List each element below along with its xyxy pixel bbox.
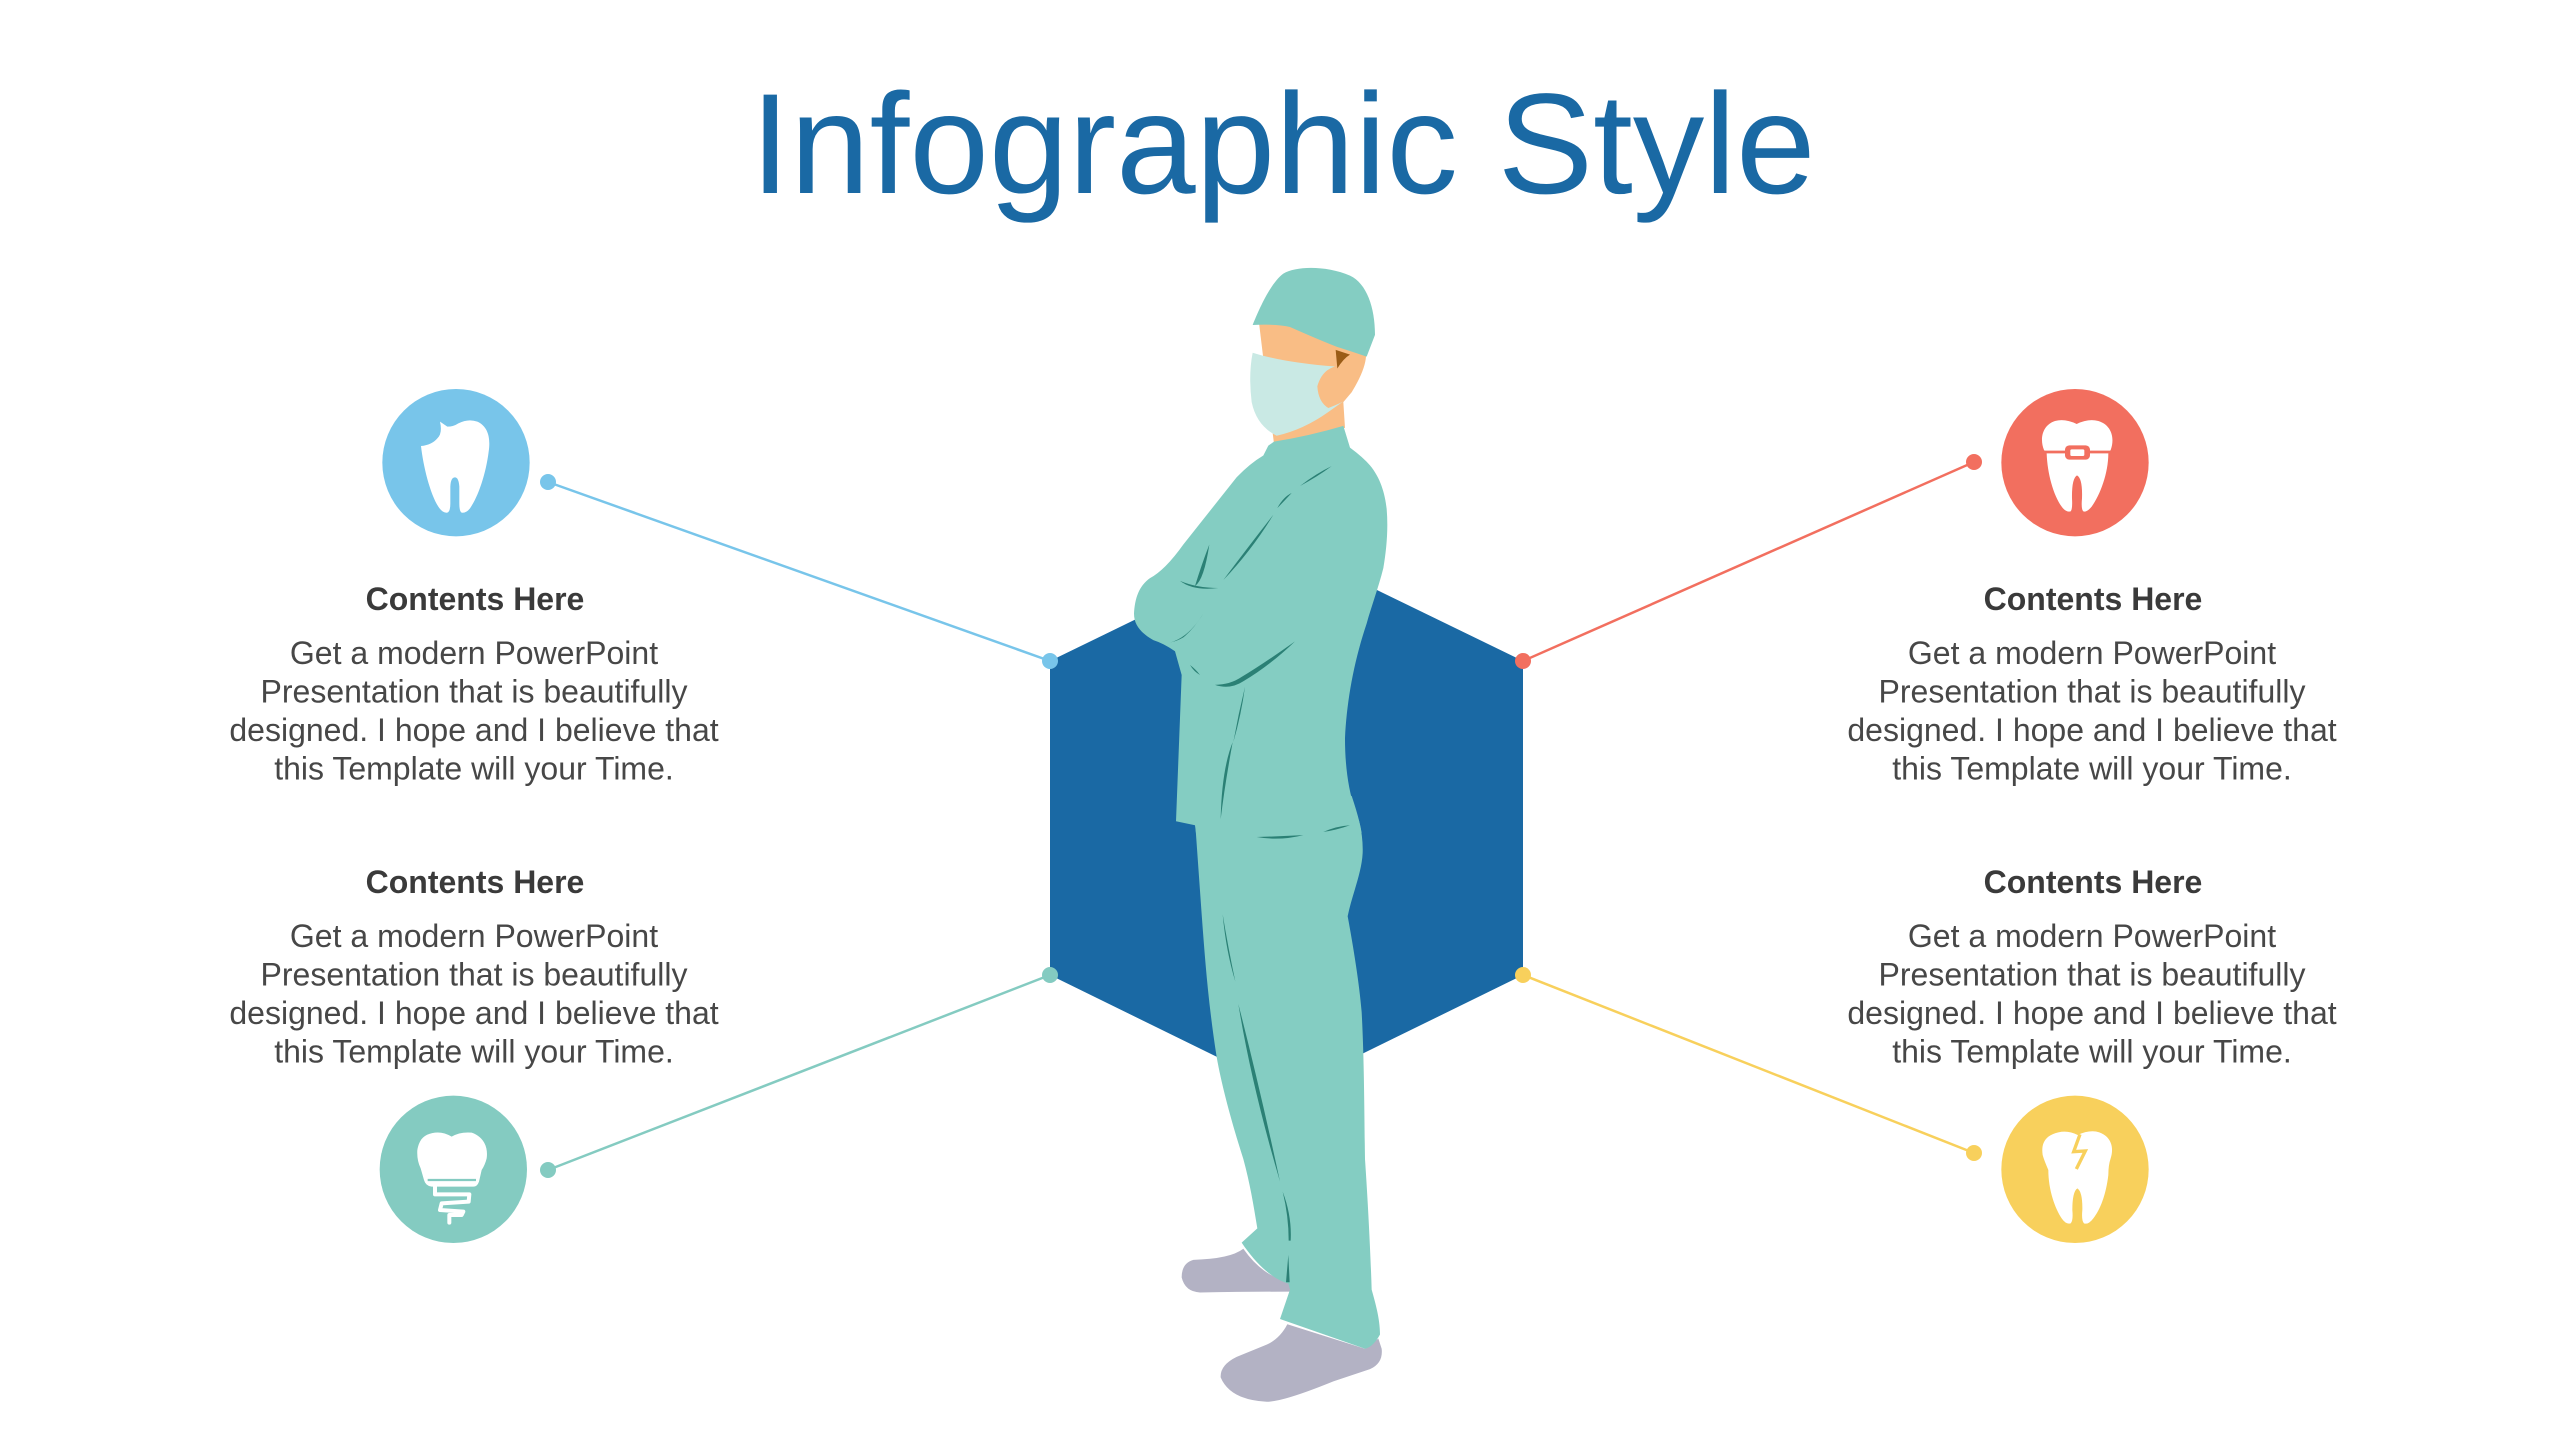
icon: tooth with braces xyxy=(2001,389,2149,536)
text block: top left: this Template will your Time. xyxy=(274,750,674,786)
text block: bottom left: Get a modern PowerPoint xyxy=(290,918,658,954)
text block: top right: Presentation that is beautifully xyxy=(1879,674,2305,710)
text block: bottom right xyxy=(1847,864,2337,1070)
text block: bottom left: this Template will your Time. xyxy=(274,1034,674,1070)
icon: cracked tooth xyxy=(2001,1096,2149,1243)
torso, head and mask xyxy=(1134,268,1387,839)
text block: top right: Get a modern PowerPoint xyxy=(1908,635,2276,671)
icon: dental implant xyxy=(380,1096,527,1243)
text block: bottom left: Presentation that is beautifully xyxy=(261,956,687,992)
central hexagon xyxy=(1050,546,1523,1091)
title: Infographic Style xyxy=(750,65,1816,224)
text block: top right: this Template will your Time. xyxy=(1892,750,2292,786)
surgeon figure xyxy=(1134,268,1387,1402)
connector: bottom right xyxy=(1515,967,1982,1161)
icon: decayed tooth xyxy=(382,389,530,536)
legs and shoes xyxy=(1182,796,1382,1402)
text block: bottom right: Contents Here xyxy=(1984,864,2202,900)
text block: bottom right: Get a modern PowerPoint xyxy=(1908,918,2276,954)
text block: bottom right: designed. I hope and I believe that xyxy=(1847,995,2337,1031)
text block: bottom left xyxy=(229,864,719,1070)
text block: top left: Contents Here xyxy=(366,581,584,617)
connector: bottom left xyxy=(540,967,1058,1178)
text block: bottom left: designed. I hope and I believe that xyxy=(229,995,719,1031)
text block: bottom right: Presentation that is beautifully xyxy=(1879,956,2305,992)
text block: top right xyxy=(1847,581,2337,786)
text block: top left: Get a modern PowerPoint xyxy=(290,635,658,671)
text block: top right: Contents Here xyxy=(1984,581,2202,617)
text block: top left xyxy=(229,581,719,786)
connector: top left xyxy=(540,474,1058,669)
text block: bottom left: Contents Here xyxy=(366,864,584,900)
text block: top right: designed. I hope and I believe that xyxy=(1847,712,2337,748)
text block: top left: designed. I hope and I believe that xyxy=(229,712,719,748)
text block: top left: Presentation that is beautifully xyxy=(261,674,687,710)
text block: bottom right: this Template will your Time. xyxy=(1892,1034,2292,1070)
connector: top right xyxy=(1515,454,1982,669)
